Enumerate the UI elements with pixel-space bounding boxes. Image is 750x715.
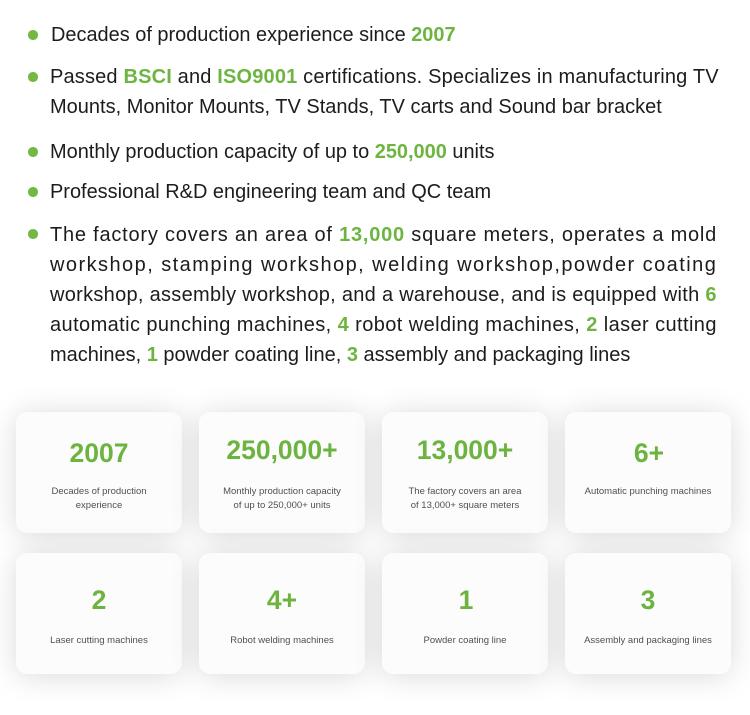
stat card: 2007: 2007 <box>70 438 128 468</box>
stat card: 4+: Robot welding machines <box>230 635 334 646</box>
stat card: 2 <box>16 553 182 674</box>
bullet: factory area and equipment: automatic punching machines, 4 robot welding machines, 2 laser cutting <box>50 314 717 336</box>
stat card: 1 <box>382 553 548 674</box>
stat card: 1: Powder coating line <box>424 635 506 646</box>
stat card: 6+ <box>565 412 731 533</box>
stat card: 6+: Automatic punching machines <box>585 486 711 497</box>
stat card: 6+: 6+ <box>634 438 664 468</box>
stat card: 250,000+: 250,000+ <box>226 435 338 465</box>
stat card: 1: 1 <box>459 585 473 615</box>
stat card: 2: 2 <box>92 585 106 615</box>
stat card: 250,000+ <box>199 412 365 533</box>
stat card: 13,000+: of 13,000+ square meters <box>411 500 519 511</box>
bullet: certifications <box>28 66 719 118</box>
stat card: 2: Laser cutting machines <box>50 635 148 646</box>
stat card: 13,000+ <box>382 412 548 533</box>
bullet: factory area and equipment: machines, 1 powder coating line, 3 assembly and packaging lines <box>50 344 630 366</box>
bullet: production experience: Decades of production experience since 2007 <box>51 24 456 46</box>
bullet: certifications: Mounts, Monitor Mounts, TV Stands, TV carts and Sound bar bracket <box>50 96 662 118</box>
stat card: 2007: experience <box>76 500 122 511</box>
stat card: 250,000+: Monthly production capacity <box>223 486 341 497</box>
stat card: 3: Assembly and packaging lines <box>584 635 712 646</box>
bullet: factory area and equipment: workshop, assembly workshop, and a warehouse, and is equipped with 6 <box>50 284 717 306</box>
bullet: engineering team: Professional R&D engineering team and QC team <box>50 181 491 203</box>
stat card: 4+: 4+ <box>267 585 297 615</box>
stat card: 3: 3 <box>641 585 655 615</box>
stat card: 2007: Decades of production <box>51 486 147 497</box>
bullet: monthly capacity: Monthly production capacity of up to 250,000 units <box>50 141 494 163</box>
stat card: 2007 <box>16 412 182 533</box>
bullet: factory area and equipment <box>28 224 717 366</box>
bullet: factory area and equipment: The factory covers an area of 13,000 square meters, operates a mold <box>50 224 717 246</box>
stat card: 13,000+: The factory covers an area <box>408 486 522 497</box>
stat card: 250,000+: of up to 250,000+ units <box>234 500 330 511</box>
text block: factory highlights <box>28 24 719 366</box>
bullet: certifications: Passed BSCI and ISO9001 certifications. Specializes in manufacturing TV <box>50 66 719 88</box>
bullet: factory area and equipment: workshop, stamping workshop, welding workshop,powder coating <box>50 254 717 276</box>
stat card: 13,000+: 13,000+ <box>417 435 513 465</box>
stat card: 4+ <box>199 553 365 674</box>
stat card: 3 <box>565 553 731 674</box>
